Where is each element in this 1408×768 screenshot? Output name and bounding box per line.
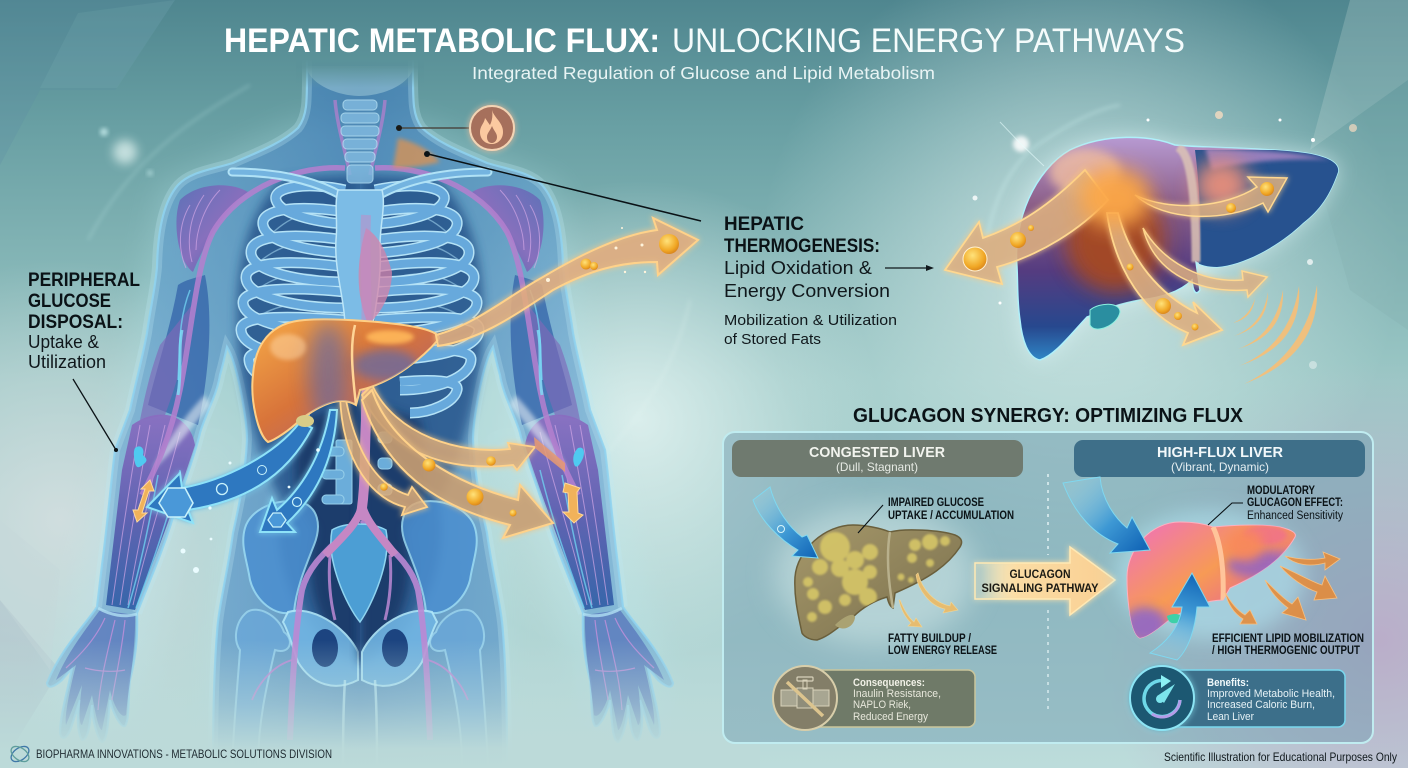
sternum [336,190,383,330]
left arm exchange arrow [133,480,154,522]
callout: modulatory leader [1208,503,1243,525]
right arm exchange arrow [563,483,583,523]
consequences box: NAPLO Riek, [853,699,911,711]
aorta [360,330,367,520]
arrow: low energy release 2 [899,600,922,627]
right half of body [360,60,673,766]
label: fatty buildup [888,633,997,657]
glucose arrow to hip [260,410,337,532]
aorta upper [365,215,367,330]
chin [306,66,414,96]
arrow: glucose rising into high-flux liver [1150,573,1210,660]
congested liver illustration [775,505,975,645]
small liver [252,319,439,442]
upper highlight [1049,148,1121,196]
body outer glow [50,120,670,745]
text block: peripheral glucose disposal: Utilization [28,352,106,372]
sacrum [331,524,387,622]
right lobe highlight [1194,159,1250,211]
header: high-flux liver: HIGH-FLUX LIVER [1157,445,1284,461]
icon: metabolic gauge [1130,666,1194,730]
header: high-flux liver [1074,440,1365,477]
right lobe base [1195,150,1338,267]
label: efficient lipid mobilization [1212,633,1364,657]
left half of body [47,60,360,766]
human body figure [0,58,760,768]
gallbladder [835,615,855,629]
gallbladder [1090,304,1120,329]
label: modulatory glucagon effect: MODULATORY [1247,485,1315,497]
text block: hepatic thermogenesis: of Stored Fats [724,331,821,348]
right tendon [534,437,565,472]
right lobe top band [1205,148,1330,170]
benefits box [1130,666,1345,730]
footer: company: BIOPHARMA INNOVATIONS - METABOLIC SOLUTIONS DIVISION [36,747,332,761]
benefits box: Lean Liver [1207,711,1254,723]
label: impaired glucose: UPTAKE / ACCUMULATION [888,510,1014,522]
cervical spine [341,100,379,183]
arrow out right [1143,228,1267,297]
hepatic core glow [1079,167,1151,227]
text block: peripheral glucose disposal: DISPOSAL: [28,312,123,333]
panel: glucagon synergy comparison [723,432,1373,743]
consequences box [773,666,975,730]
large liver illustration [945,105,1357,384]
neck top fade [296,58,424,88]
icon: company logo [8,743,32,765]
label: modulatory glucagon effect: Enhanced Sensitivity [1247,510,1343,522]
title [224,22,1185,60]
label: fatty buildup: LOW ENERGY RELEASE [888,645,997,657]
text block: hepatic thermogenesis: Mobilization & Utilization [724,312,897,329]
text block: peripheral glucose disposal: Uptake & [28,332,99,352]
text block: hepatic thermogenesis: Lipid Oxidation & [724,257,873,278]
consequences box: Consequences: [853,677,925,689]
callout: peripheral leader line [73,379,118,452]
label: impaired glucose: IMPAIRED GLUCOSE [888,497,984,509]
heat waves [1233,285,1317,384]
text block: hepatic thermogenesis: HEPATIC [724,214,804,235]
arrow: glucagon signaling pathway: GLUCAGON [1010,567,1070,581]
left lobe center [1065,188,1165,292]
benefits box: Improved Metabolic Health, [1207,688,1335,700]
arrow: glucagon signaling pathway: SIGNALING PATHWAY [982,581,1098,595]
bottom fade [0,640,760,768]
label: fatty buildup: FATTY BUILDUP / [888,633,972,645]
consequences box: Inaulin Resistance, [853,688,941,700]
arrow: glucose entering congested liver [753,487,818,558]
label: modulatory glucagon effect: GLUCAGON EFFECT: [1247,497,1343,509]
brown fat patch [393,138,440,168]
particles [180,448,320,573]
lipid arrow to right forearm [362,390,553,538]
lumbar spine [322,432,392,504]
gallbladder [1167,614,1181,623]
title: HEPATIC METABOLIC FLUX: [224,22,660,60]
consequences box: Reduced Energy [853,711,928,723]
callout: impaired glucose leader [858,505,883,533]
label: impaired glucose [888,497,1014,522]
lipid arrow to hip [340,395,427,515]
arrow out left [945,170,1108,284]
arrow: glucose entering high-flux liver [1063,477,1150,553]
header: high-flux liver: (Vibrant, Dynamic) [1171,460,1269,474]
right arm glucose marker [573,448,584,467]
label: efficient lipid mobilization: / HIGH THERMOGENIC OUTPUT [1212,645,1360,657]
header: congested liver: (Dull, Stagnant) [836,460,918,474]
callout: thermogenesis leader line [424,151,701,221]
arrow: glucagon signaling pathway [975,547,1115,615]
left arm glucose marker [134,446,146,467]
label: efficient lipid mobilization: EFFICIENT LIPID MOBILIZATION [1212,633,1364,645]
benefits box: Increased Caloric Burn, [1207,699,1315,711]
high-flux liver illustration [1115,510,1305,643]
icon: blocked valve [773,666,837,730]
lipid arrow to right elbow [362,385,535,470]
lipid arrow to thermogenesis [436,218,698,346]
arrows: lipid output [1225,552,1340,624]
sparkle and halo [985,105,1120,270]
title: UNLOCKING ENERGY PATHWAYS [672,22,1185,60]
text block: peripheral glucose disposal: PERIPHERAL [28,270,140,291]
benefits box: Benefits: [1207,677,1249,689]
liver glow [1017,137,1338,360]
text block: peripheral glucose disposal [28,270,140,372]
divider [1047,474,1049,555]
heart [359,228,392,324]
arrow: low energy release 1 [916,573,958,613]
heading: glucagon synergy: GLUCAGON SYNERGY: OPTIMIZING FLUX [853,405,1244,427]
falciform ligament [1178,147,1196,262]
arrow: text to liver [885,265,934,271]
aorta bifurcation [325,505,395,555]
text block: hepatic thermogenesis [724,214,897,348]
header: congested liver [732,440,1023,477]
falciform [888,532,893,608]
callout: flame leader line [396,125,470,131]
header: congested liver: CONGESTED LIVER [809,445,946,461]
text block: hepatic thermogenesis: Energy Conversion [724,280,890,301]
text block: peripheral glucose disposal: GLUCOSE [28,291,111,312]
text block: hepatic thermogenesis: THERMOGENESIS: [724,236,880,257]
arrow out lower right [1107,213,1222,345]
subtitle: Integrated Regulation of Glucose and Lipid Metabolism [472,63,935,83]
label: modulatory glucagon effect [1247,485,1343,522]
sparkles [972,111,1357,369]
icon: flame [470,106,514,150]
liver shape [1017,137,1338,360]
glucose arrow to left arm [147,422,312,523]
arrow out upper right [1135,177,1287,216]
